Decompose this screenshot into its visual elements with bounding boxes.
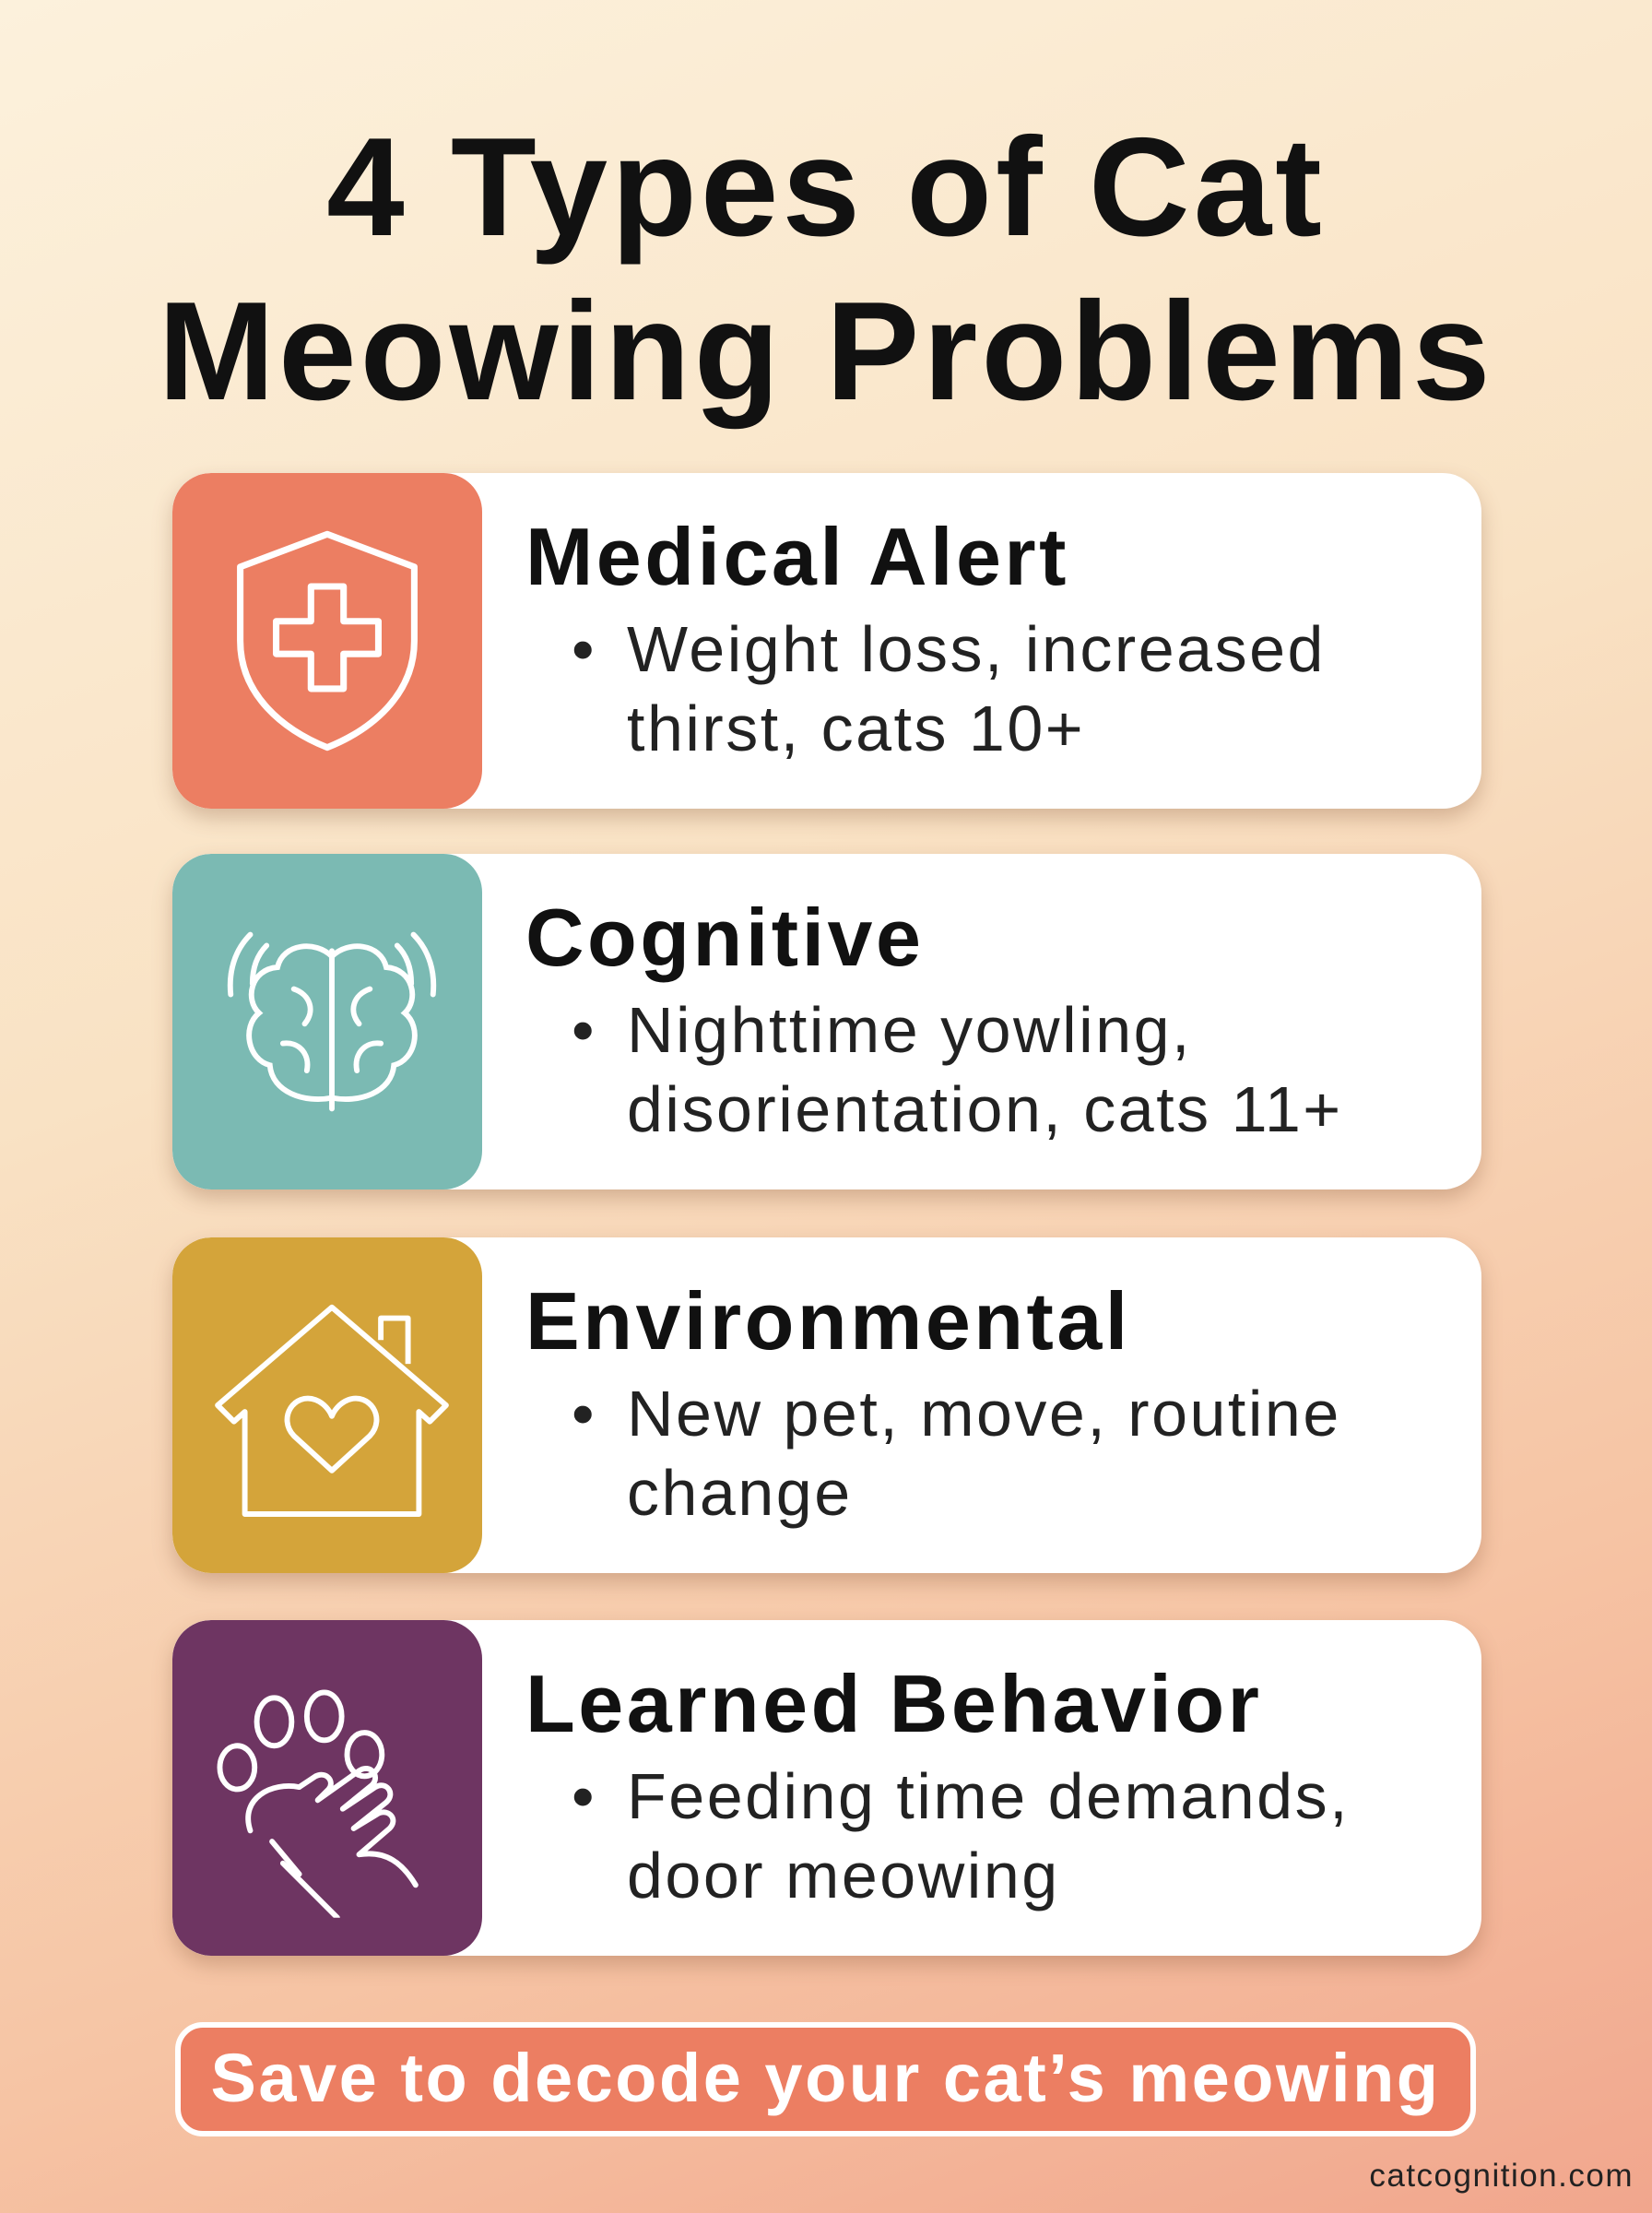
- icon: brain: [172, 854, 482, 1189]
- card: learned behavior: [172, 1620, 1481, 1956]
- heading: Environmental: [525, 1275, 1131, 1367]
- bullet: Feeding time demands, door meowing: [627, 1760, 1350, 1911]
- icon: paw and hand: [172, 1620, 482, 1956]
- title: [158, 109, 1494, 430]
- card: cognitive: [172, 854, 1481, 1189]
- icon: house heart: [172, 1237, 482, 1573]
- footer url: catcognition.com: [1369, 2158, 1634, 2194]
- call to action button: [175, 2022, 1476, 2136]
- call to action button: Save to decode your cat’s meowing: [210, 2040, 1440, 2116]
- title: 4 Types of Cat: [326, 109, 1326, 266]
- title: Meowing Problems: [158, 273, 1494, 430]
- card: medical alert: [172, 473, 1481, 809]
- heading: Medical Alert: [525, 511, 1069, 602]
- icon: shield cross: [172, 473, 482, 809]
- bullet: Weight loss, increased thirst, cats 10+: [627, 613, 1326, 764]
- heading: Learned Behavior: [525, 1658, 1262, 1749]
- heading: Cognitive: [525, 892, 924, 983]
- card: environmental: [172, 1237, 1481, 1573]
- bullet: Nighttime yowling, disorientation, cats 11+: [627, 994, 1343, 1145]
- bullet: New pet, move, routine change: [627, 1378, 1341, 1529]
